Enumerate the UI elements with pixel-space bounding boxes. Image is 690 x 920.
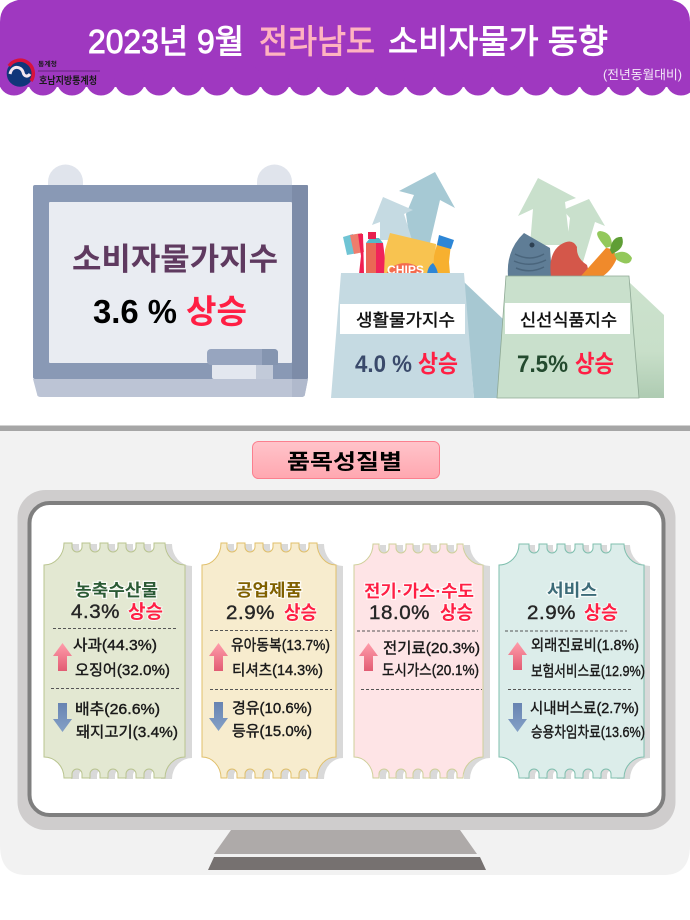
bag	[497, 276, 639, 398]
card value	[71, 601, 163, 623]
icon: toothbrush, toothpaste, chips, sock: CHIPS	[387, 263, 424, 277]
card heading: 서비스	[547, 581, 597, 600]
icon: up arrow	[359, 643, 378, 671]
monitor	[18, 490, 676, 870]
panel: living necessities index	[331, 172, 503, 398]
falling items	[75, 701, 178, 741]
falling items: 승용차임차료(13.6%)	[531, 724, 645, 741]
comparison note: (전년동월대비)	[603, 68, 682, 82]
card: electricity, gas, water	[354, 544, 490, 779]
rising items	[531, 637, 645, 680]
icon: down arrow	[209, 702, 228, 731]
card heading: 공업제품	[236, 581, 302, 600]
falling items: 경유(10.6%)	[232, 700, 312, 717]
value: fresh food	[517, 351, 614, 378]
icon: up arrow	[53, 643, 72, 671]
card value: 상승	[584, 602, 618, 624]
logo text: 호남지방통계청	[39, 74, 97, 87]
title: 전라남도	[259, 23, 375, 60]
icon: up arrow	[508, 642, 527, 670]
icon: toothbrush, toothpaste, chips, sock	[343, 232, 454, 277]
falling items: 돼지고기(3.4%)	[76, 724, 178, 741]
icon: down arrow	[53, 703, 72, 732]
card value: 18.0%	[369, 603, 430, 624]
card value: 상승	[128, 601, 163, 623]
bag shadow	[629, 282, 664, 398]
rising items: 사과(44.3%)	[73, 637, 157, 654]
label: fresh food: 신선식품지수	[520, 311, 617, 330]
rising items: 전기료(20.3%)	[383, 640, 480, 657]
card value: 상승	[440, 602, 473, 624]
title	[88, 23, 608, 60]
card value: 상승	[284, 602, 317, 624]
icon: board pins	[48, 164, 292, 186]
section heading: by item type	[252, 442, 440, 478]
panel: fresh food index	[497, 178, 664, 398]
board frame	[33, 185, 308, 397]
board value: 3.6 %	[93, 293, 177, 330]
icon: statistics office logo	[7, 60, 33, 87]
label: living necessities	[340, 304, 465, 334]
icon: eraser	[207, 349, 278, 379]
logo text: 통계청	[38, 59, 57, 68]
icon: rising arrows	[372, 172, 455, 243]
card value	[527, 602, 618, 624]
rising items: 오징어(32.0%)	[75, 662, 170, 679]
card: agricultural products	[44, 543, 192, 779]
panel: consumer price index board	[33, 164, 308, 397]
rising items: 티셔츠(14.3%)	[232, 662, 323, 679]
value: fresh food: 상승	[575, 351, 614, 378]
section heading: by item type: 품목성질별	[287, 451, 402, 474]
rising items: 유아동복(13.7%)	[231, 637, 330, 654]
header banner	[0, 0, 690, 96]
board value: 상승	[186, 293, 247, 330]
rising items	[73, 637, 170, 679]
icon: down arrow	[508, 703, 527, 732]
title: 2023년 9월	[88, 23, 244, 60]
board heading: 소비자물가지수	[72, 242, 278, 277]
card value: 2.9%	[226, 603, 275, 624]
value: living necessities: 4.0 %	[355, 351, 412, 378]
falling items	[232, 700, 312, 740]
value: living necessities	[355, 351, 458, 378]
icon: up arrow	[209, 643, 228, 671]
rising items: 외래진료비(1.8%)	[531, 637, 639, 654]
value: living necessities: 상승	[418, 351, 458, 378]
falling items: 시내버스료(2.7%)	[530, 700, 639, 717]
card value: 4.3%	[71, 602, 120, 623]
panel: lower gray section	[0, 426, 690, 875]
label: living necessities: 생활물가지수	[356, 311, 455, 330]
card heading: 농축수산물	[75, 581, 158, 600]
title: 소비자물가 동향	[388, 23, 608, 60]
rising items: 도시가스(20.1%)	[382, 662, 479, 679]
board value	[93, 293, 247, 330]
card value	[226, 602, 317, 624]
icon: fish, meat, carrot	[508, 231, 632, 276]
icon: rising arrows	[518, 178, 605, 262]
label: fresh food	[505, 303, 630, 334]
rising items	[231, 637, 330, 679]
falling items: 배추(26.6%)	[75, 701, 160, 718]
falling items	[530, 700, 645, 741]
card value: 2.9%	[527, 603, 576, 624]
rising items	[382, 640, 480, 679]
card: industrial products	[202, 543, 343, 779]
bag shadow	[464, 282, 503, 398]
card value	[369, 602, 473, 624]
card: services	[499, 544, 650, 779]
card heading: 전기·가스·수도	[364, 582, 474, 601]
value: fresh food: 7.5%	[517, 351, 568, 378]
falling items: 등유(15.0%)	[232, 723, 312, 740]
logo text	[38, 59, 100, 87]
rising items: 보험서비스료(12.9%)	[531, 663, 645, 680]
bag	[331, 273, 474, 398]
